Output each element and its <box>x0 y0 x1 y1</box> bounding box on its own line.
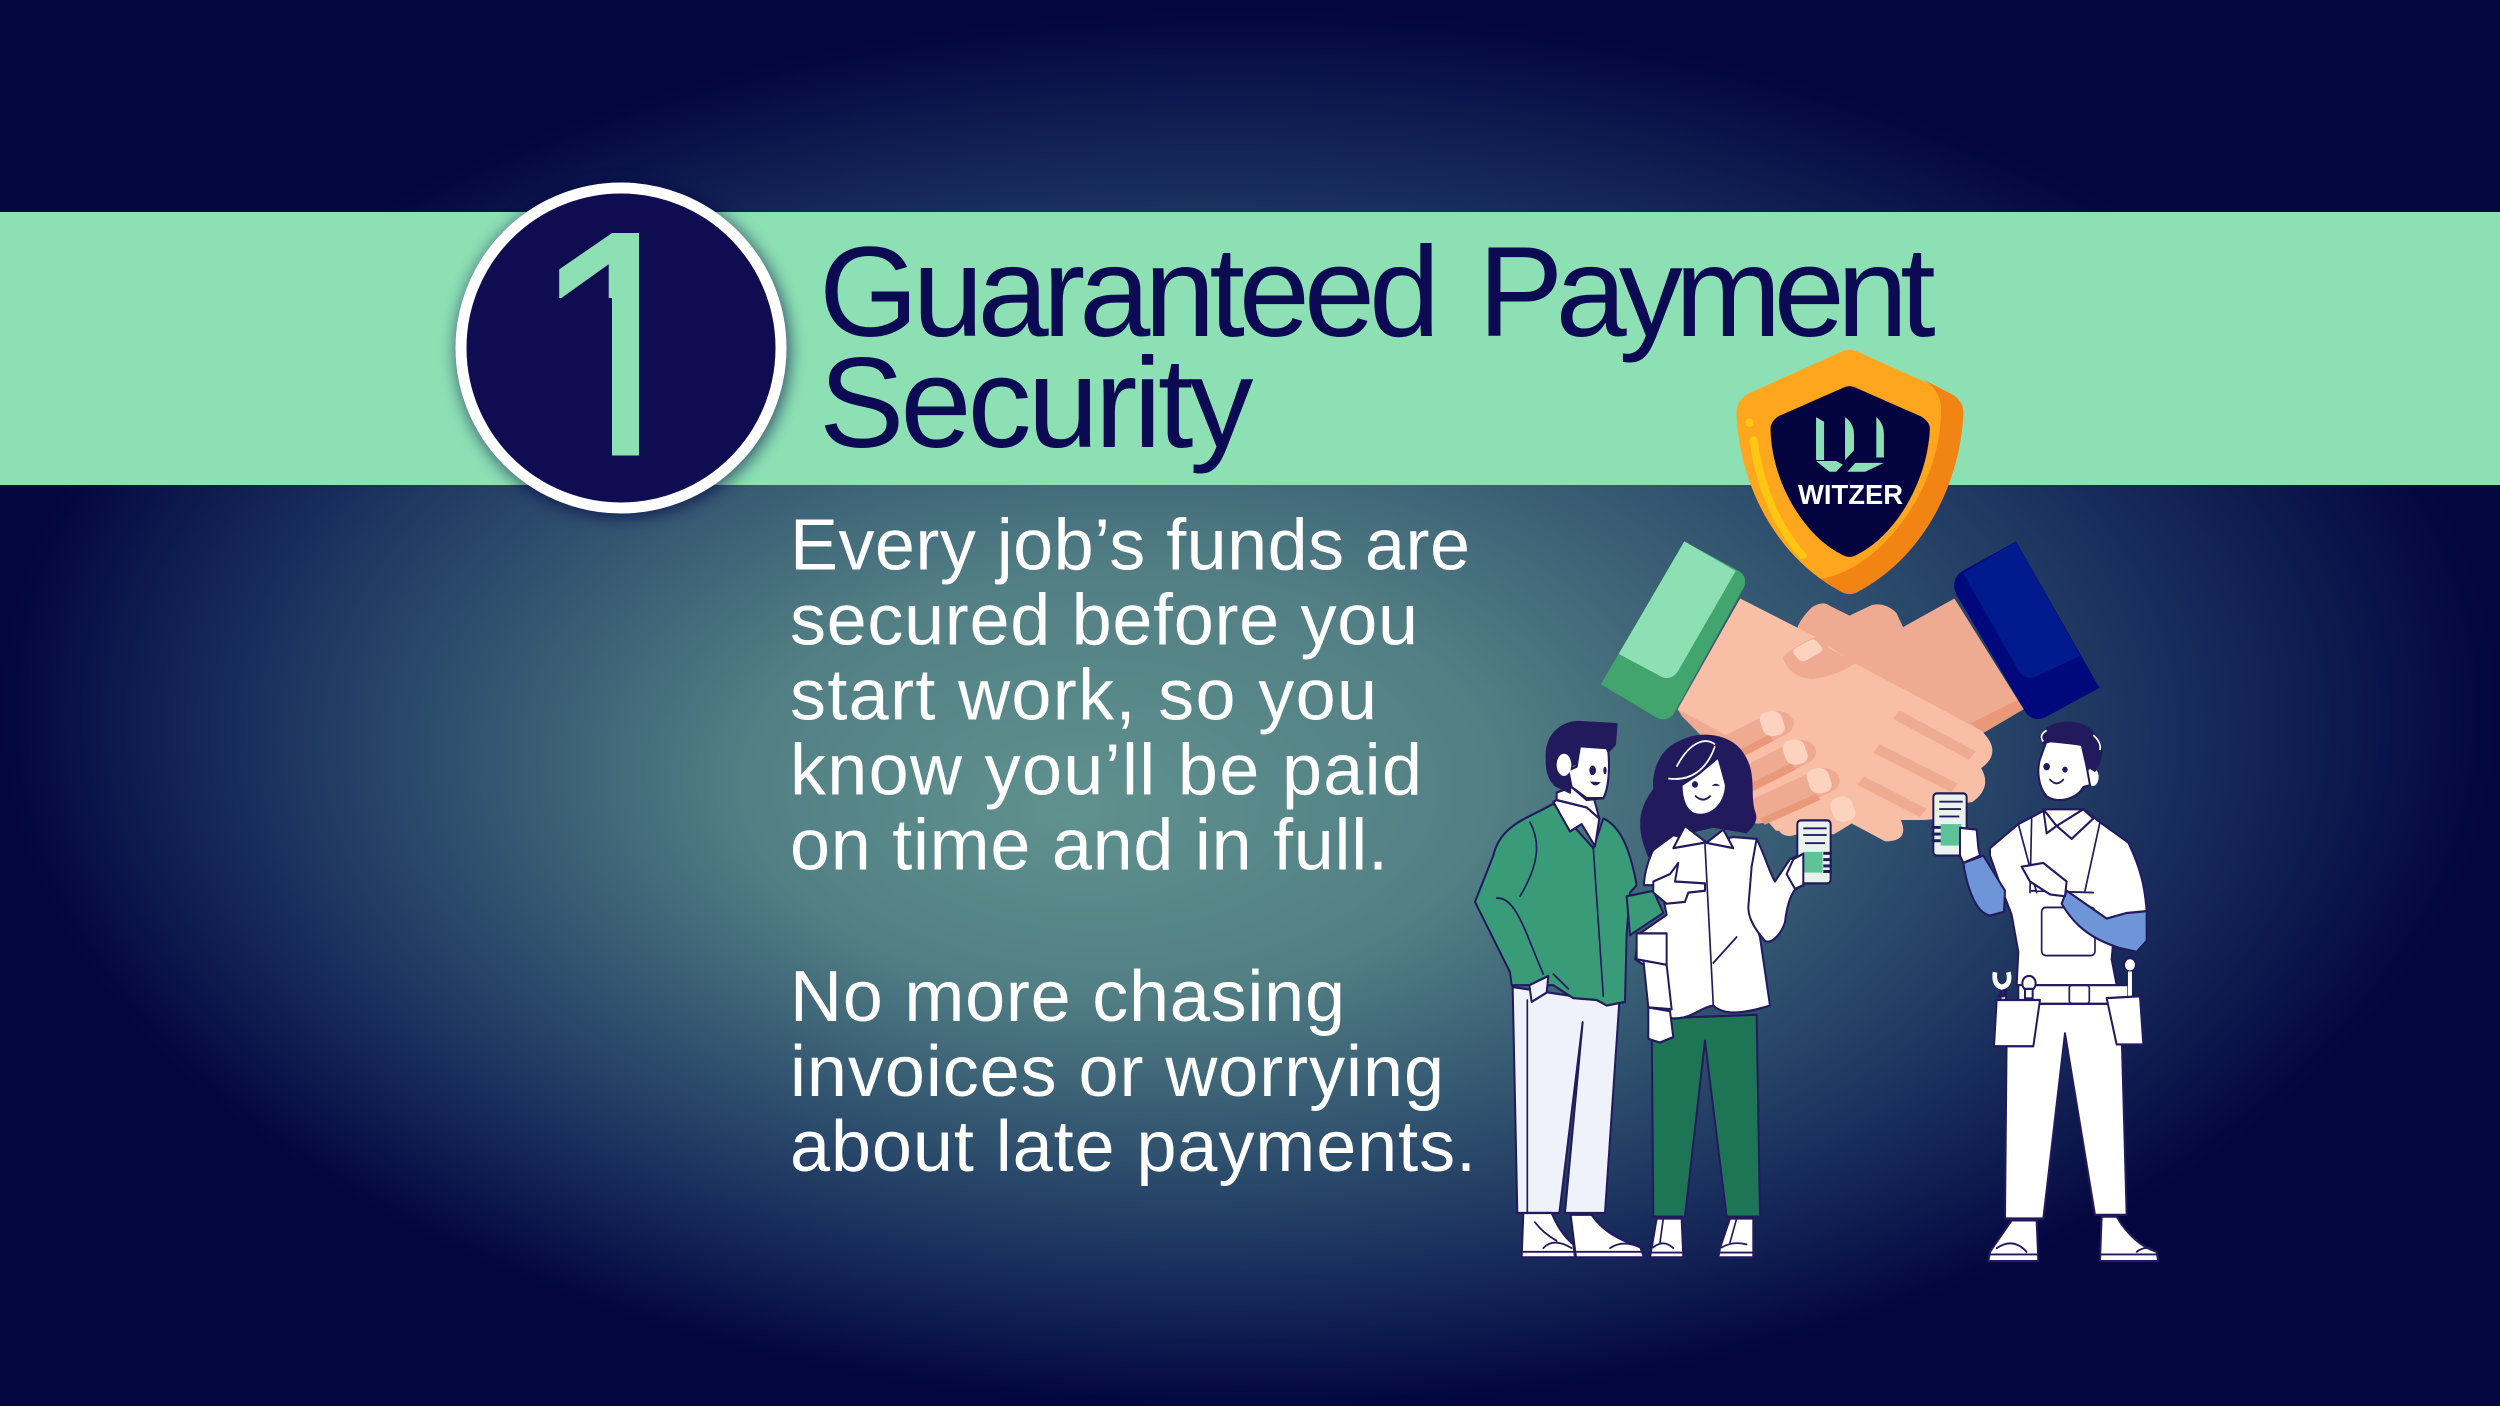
heading band <box>0 212 2500 485</box>
shield badge <box>1737 350 1963 594</box>
title <box>819 221 1935 475</box>
body text: invoices or worrying <box>790 1032 1444 1112</box>
body text: on time and in full. <box>790 806 1388 886</box>
handshake <box>1601 541 2100 841</box>
title: Payment <box>1478 221 1935 364</box>
left cuff <box>1601 541 1745 719</box>
body text: No more chasing <box>790 957 1345 1037</box>
number badge <box>456 165 790 522</box>
title: Security <box>819 332 1253 475</box>
body text <box>790 506 1476 1187</box>
body text: Every job’s funds are <box>790 506 1470 586</box>
body text: secured before you <box>790 580 1418 660</box>
body text: about late payments. <box>790 1107 1476 1187</box>
shield badge: WITZER <box>1798 479 1903 510</box>
man in green sweater <box>1475 722 1663 1257</box>
woman holding phone <box>1635 735 1832 1257</box>
number badge: 1 <box>530 165 707 522</box>
worker in overalls <box>1932 722 2158 1261</box>
title: Guaranteed <box>819 221 1434 364</box>
body text: start work, so you <box>790 656 1377 736</box>
right cuff <box>1954 541 2100 719</box>
body text: know you’ll be paid <box>790 730 1422 810</box>
